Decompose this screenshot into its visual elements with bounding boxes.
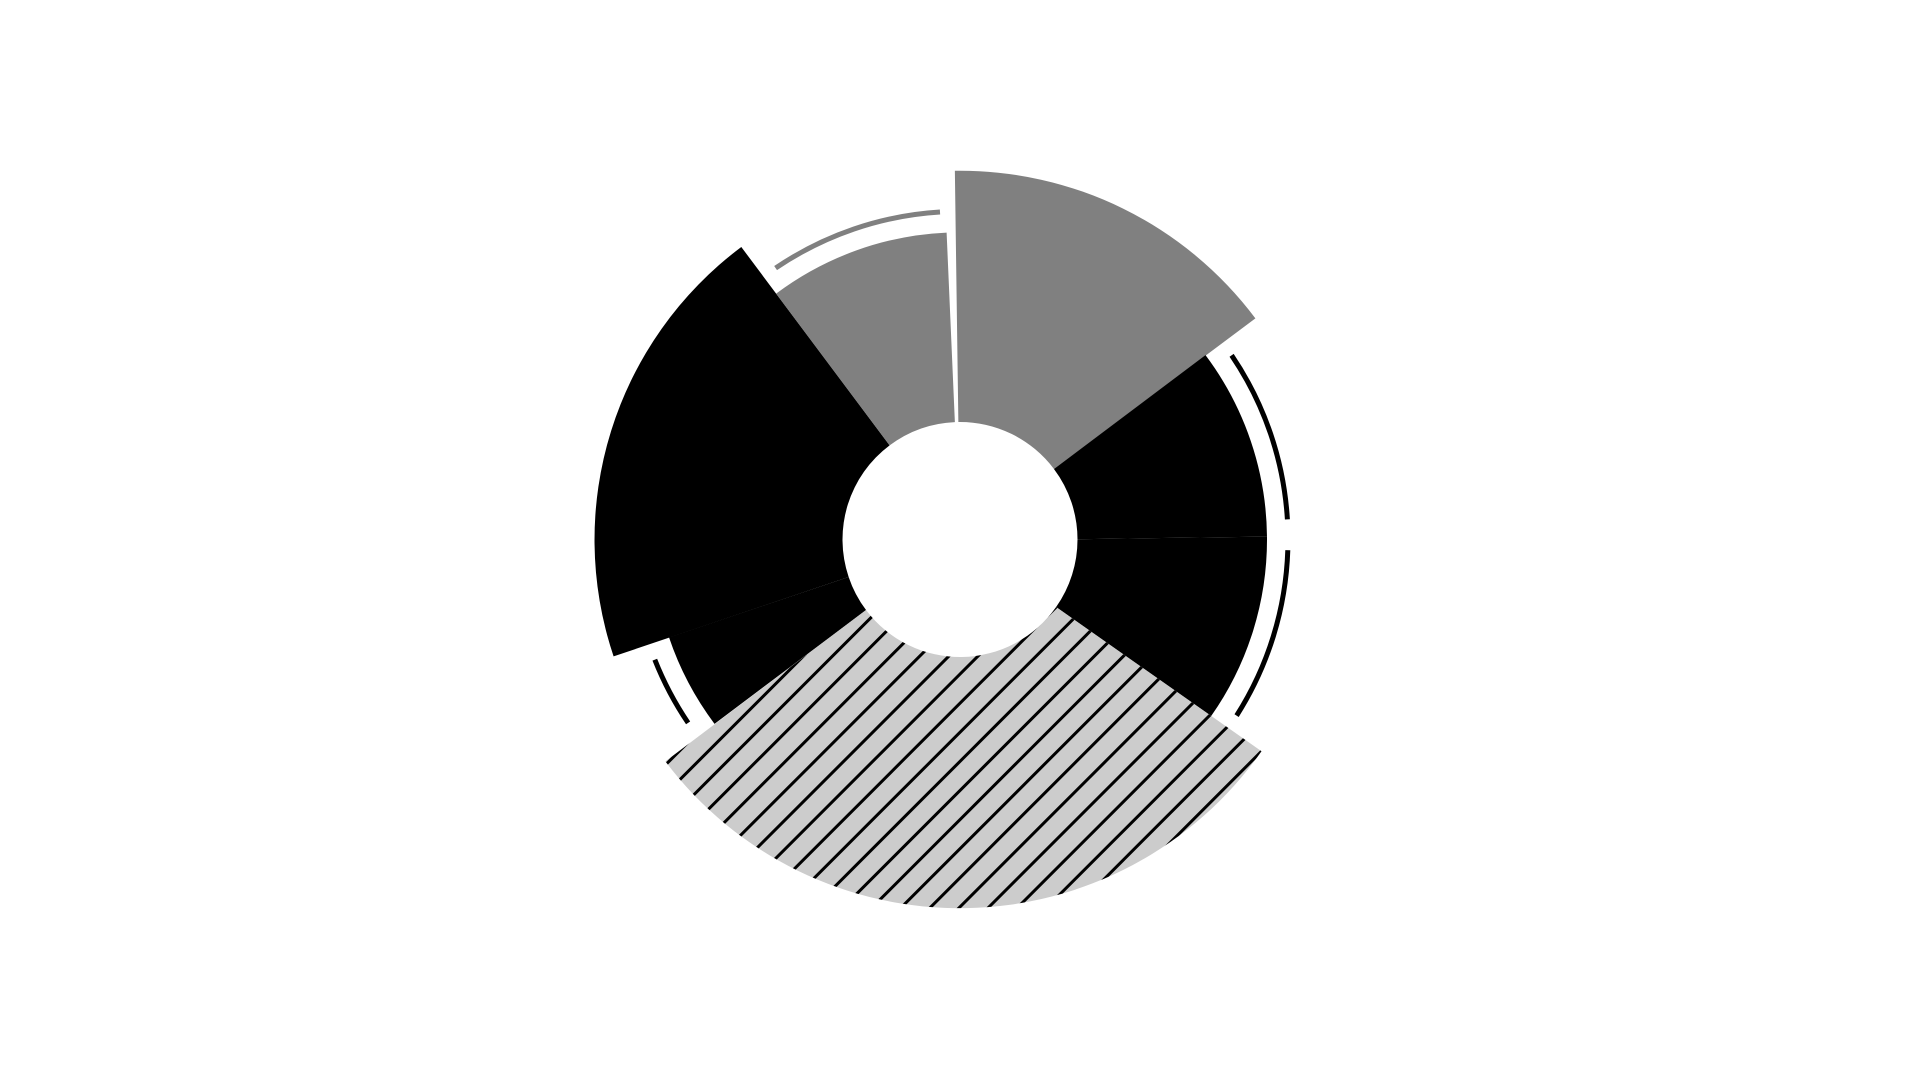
arc: black outer arc upper right <box>1232 355 1287 519</box>
slice: black lower left sector <box>669 577 866 724</box>
slice: small grey sector <box>776 233 955 445</box>
chart: radial pie chart <box>594 170 1290 908</box>
slice: black upper right sector <box>1054 355 1267 539</box>
slice: large black left sector <box>595 247 890 656</box>
arc: grey outer arc top <box>776 212 940 268</box>
slice: black lower right sector <box>1056 537 1267 716</box>
arc: black outer arc lower right <box>1237 550 1288 716</box>
slice: large grey sector <box>955 171 1255 469</box>
arc: black outer arc lower left <box>655 660 688 723</box>
slice: hatched bottom sector <box>666 607 1262 908</box>
